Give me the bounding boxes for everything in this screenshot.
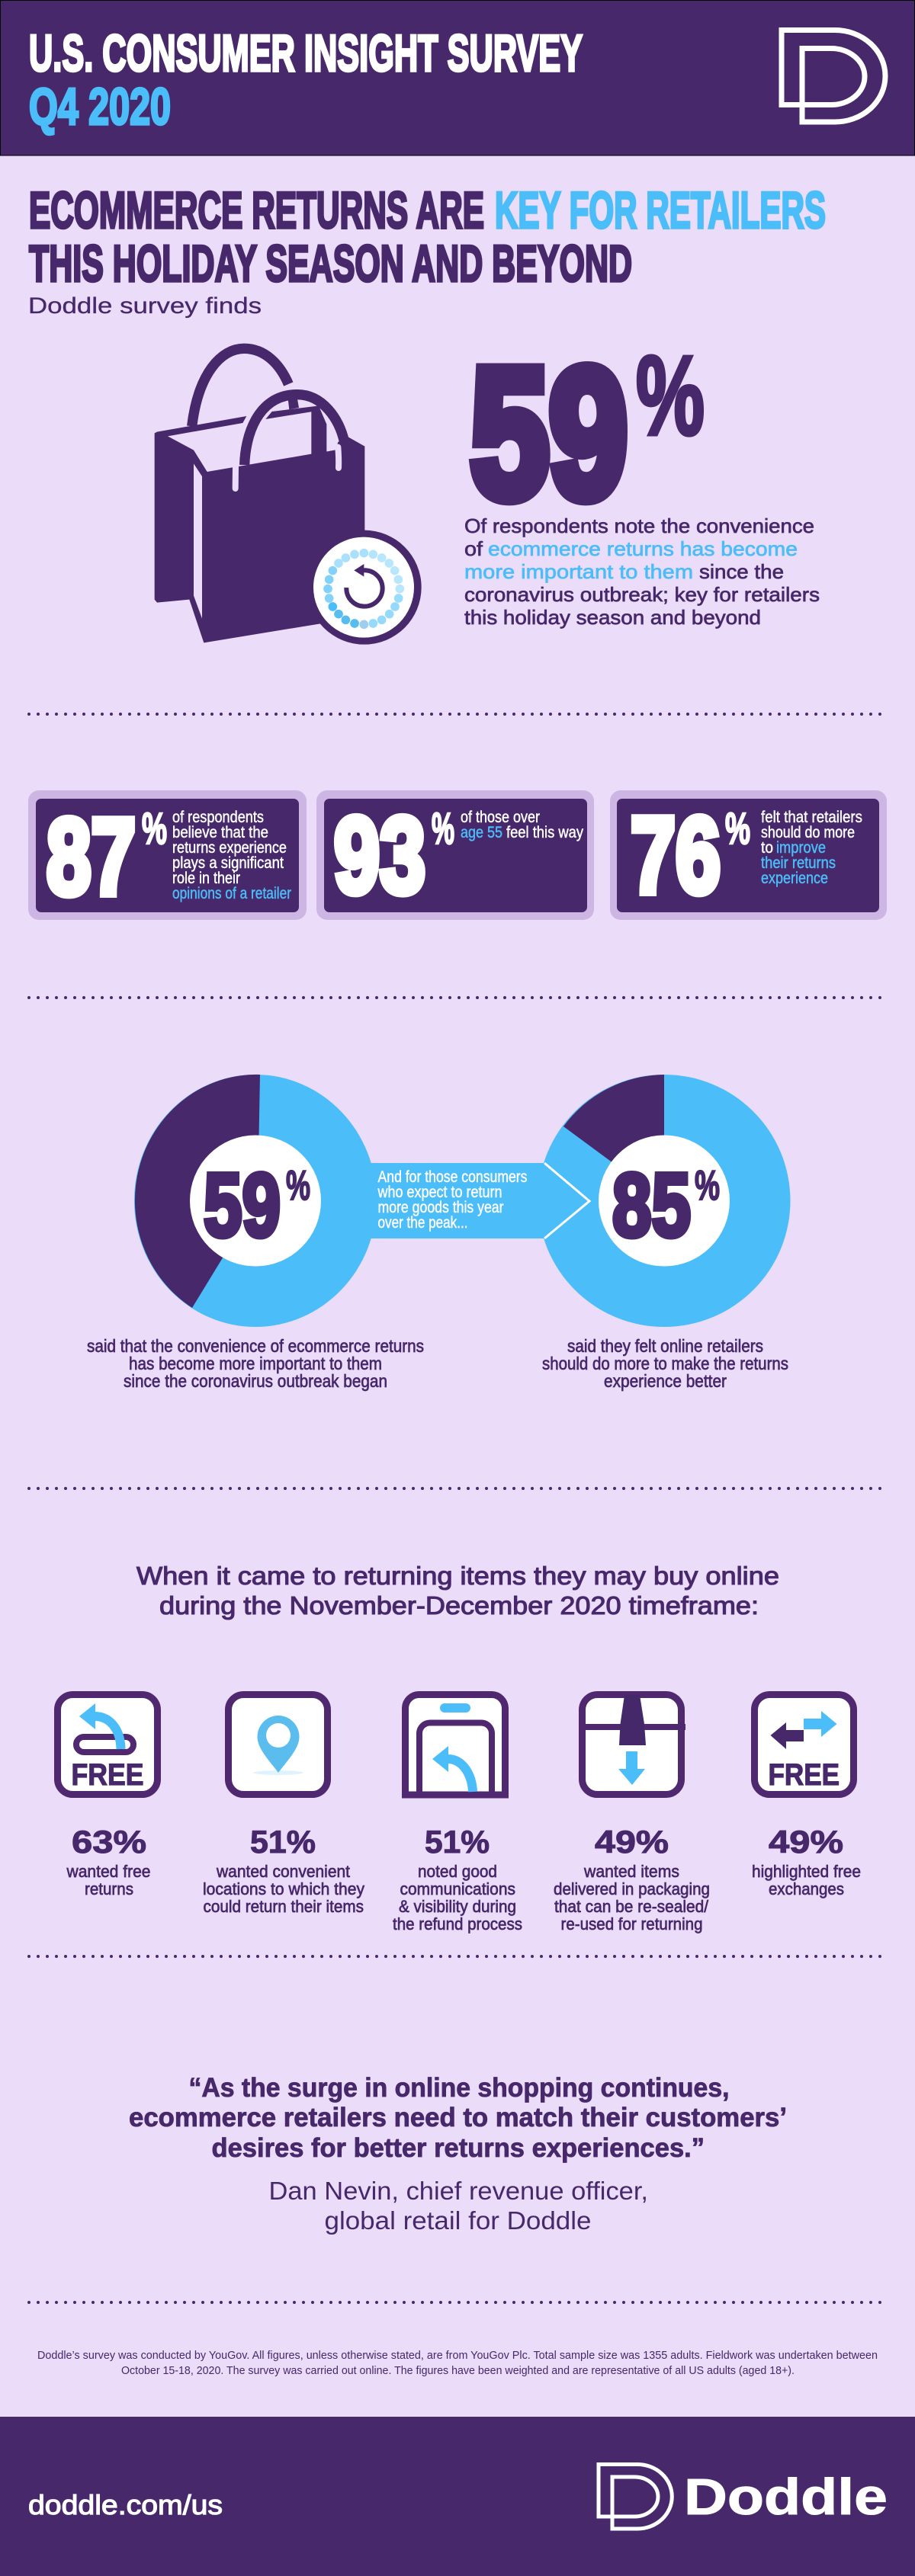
panel: 76% stat card: experience: [761, 870, 828, 887]
icon: Doddle logo mark small: [599, 2465, 672, 2529]
column: convenient locations: locations to which they: [203, 1879, 365, 1898]
column: free returns: 63%: [72, 1824, 146, 1860]
caption: 59% donut: said that the convenience of ecommerce returns: [87, 1336, 424, 1356]
caption: 59% donut: [87, 1336, 424, 1391]
panel: 76% stat card: %: [725, 804, 750, 854]
stat description: this holiday season and beyond: [464, 606, 761, 629]
stat description: since the: [699, 560, 784, 583]
column: communications: [393, 1694, 522, 1934]
panel: 76% stat card: 76: [631, 795, 721, 916]
big stat: 59%: 59: [470, 331, 628, 537]
panel: 76% stat card: felt that retailers: [761, 809, 862, 826]
icon: shopping bag with return badge: [155, 348, 422, 645]
column: convenient locations: could return their items: [203, 1897, 364, 1916]
column: free returns: returns: [85, 1879, 133, 1898]
panel: 93% stat card: %: [432, 804, 454, 854]
icon: free returns: FREE: [72, 1758, 143, 1792]
column: packaging: 49%: [595, 1824, 669, 1860]
donut chart: 59%: %: [286, 1161, 310, 1209]
quote attribution: [268, 2177, 648, 2235]
subheading: Doddle survey finds: [28, 293, 262, 319]
wordmark: Doddle: [684, 2469, 888, 2526]
column: communications: the refund process: [393, 1914, 522, 1934]
stat description: ecommerce returns has become: [488, 537, 798, 560]
panel: 76% stat card: should do more: [761, 824, 855, 841]
donut chart: 85%: %: [695, 1161, 720, 1209]
panel: 87% stat card: role in their: [172, 870, 240, 887]
icon: re-sealable box: [579, 1695, 685, 1794]
column: free exchanges: highlighted free: [752, 1862, 861, 1881]
icon: free returns: [58, 1695, 157, 1794]
caption: 59% donut: since the coronavirus outbreak began: [124, 1371, 387, 1391]
stat description: of: [464, 537, 483, 560]
section heading: returning items: When it came to returning items they may buy online: [136, 1562, 779, 1590]
quote attribution: global retail for Doddle: [325, 2206, 592, 2235]
column: communications: 51%: [425, 1824, 490, 1860]
arrow connecting donuts: who expect to return: [377, 1184, 502, 1201]
icon: phone with return arrow: [406, 1694, 505, 1795]
caption: 59% donut: has become more important to them: [129, 1354, 382, 1373]
column: packaging: that can be re-sealed/: [554, 1897, 709, 1916]
panel: 87% stat card: 87: [47, 796, 136, 918]
footer banner: [0, 2417, 915, 2576]
big stat: 59%: %: [636, 333, 705, 459]
column: communications: communications: [400, 1879, 515, 1898]
stat description: more important to them: [464, 560, 693, 583]
icon: free exchanges: [755, 1695, 854, 1794]
panel: 87% stat card: %: [142, 804, 167, 854]
column: packaging: delivered in packaging: [554, 1879, 710, 1898]
column: free returns: [58, 1695, 157, 1898]
arrow connecting donuts: [370, 1163, 589, 1238]
column: convenient locations: 51%: [250, 1824, 316, 1860]
column: packaging: wanted items: [583, 1862, 679, 1881]
panel: 87% stat card: of respondents: [172, 809, 264, 826]
stat description: [464, 514, 820, 629]
panel: 93% stat card: feel this way: [506, 824, 583, 841]
footnote: Doddle’s survey was conducted by YouGov. All figures, unless otherwise stated, are from YouGov Plc. Total sample size was 1355 adults. Fieldwork was undertaken between: [37, 2349, 878, 2362]
section heading: returning items: [136, 1562, 779, 1620]
donut chart: 85%: [538, 1075, 790, 1327]
arrow connecting donuts: more goods this year: [378, 1199, 503, 1216]
panel: 76% stat card: [610, 790, 887, 920]
column: convenient locations: wanted convenient: [216, 1862, 351, 1881]
column: communications: & visibility during: [399, 1897, 516, 1916]
column: communications: noted good: [418, 1862, 497, 1881]
donut chart: 59%: 59: [204, 1155, 281, 1256]
subtitle: quarter: Q4 2020: [29, 78, 171, 136]
panel: 87% stat card: [28, 790, 307, 920]
icon: location pin: [229, 1695, 328, 1794]
donut chart: 85%: 85: [612, 1155, 691, 1256]
panel: 93% stat card: of those over: [461, 809, 540, 826]
quote: [129, 2073, 787, 2163]
arrow connecting donuts: And for those consumers: [378, 1168, 528, 1186]
footnote: [37, 2349, 878, 2377]
title: U.S. CONSUMER INSIGHT SURVEY: [29, 24, 583, 82]
icon: Doddle logo mark: [782, 30, 885, 122]
quote: “As the surge in online shopping continues,: [189, 2073, 729, 2103]
header banner: [0, 0, 915, 155]
icon: free exchanges: FREE: [769, 1758, 840, 1792]
column: free exchanges: 49%: [769, 1824, 843, 1860]
quote: ecommerce retailers need to match their customers’: [129, 2103, 787, 2132]
column: free returns: wanted free: [66, 1862, 151, 1881]
column: packaging: [554, 1695, 710, 1934]
panel: 87% stat card: plays a significant: [172, 854, 284, 872]
quote attribution: Dan Nevin, chief revenue officer,: [268, 2177, 648, 2205]
panel: 87% stat card: opinions of a retailer: [172, 885, 291, 902]
website url: doddle.com/us: [28, 2489, 223, 2520]
caption: 85% donut: should do more to make the returns: [542, 1354, 788, 1373]
panel: 76% stat card: improve: [776, 839, 826, 857]
caption: 85% donut: experience better: [604, 1371, 727, 1391]
panel: 93% stat card: age 55: [461, 824, 502, 841]
footnote: October 15-18, 2020. The survey was carried out online. The figures have been weighted and are representative of all US adults (aged 18+).: [121, 2364, 795, 2377]
column: packaging: re-used for returning: [561, 1914, 703, 1934]
stat description: coronavirus outbreak; key for retailers: [464, 583, 820, 606]
panel: 87% stat card: returns experience: [172, 839, 287, 857]
stat description: Of respondents note the convenience: [464, 514, 814, 537]
main heading: ECOMMERCE RETURNS ARE: [29, 181, 484, 239]
donut chart: 59%: [134, 1075, 377, 1327]
section heading: returning items: during the November-December 2020 timeframe:: [159, 1591, 759, 1620]
main heading: [29, 181, 826, 293]
column: free exchanges: exchanges: [769, 1879, 844, 1898]
panel: 76% stat card: their returns: [761, 854, 836, 872]
quote: desires for better returns experiences.”: [212, 2133, 705, 2163]
panel: 93% stat card: [316, 790, 594, 920]
panel: 76% stat card: to: [761, 839, 773, 857]
panel: 87% stat card: believe that the: [172, 824, 268, 841]
column: convenient locations: [203, 1695, 365, 1916]
caption: 85% donut: said they felt online retailers: [567, 1336, 763, 1356]
panel: 93% stat card: 93: [334, 795, 425, 916]
arrow connecting donuts: over the peak...: [378, 1214, 468, 1232]
column: free exchanges: [752, 1695, 861, 1898]
caption: 85% donut: [542, 1336, 788, 1391]
